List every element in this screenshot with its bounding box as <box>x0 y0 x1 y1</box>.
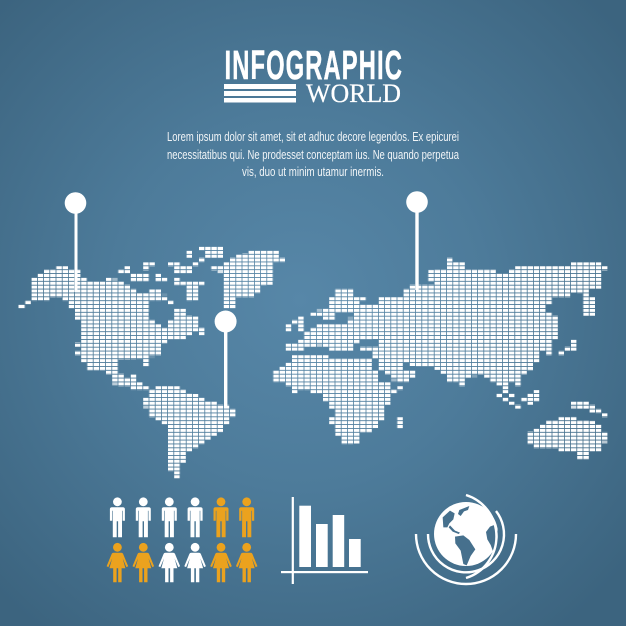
intro paragraph: Lorem ipsum dolor sit amet, sit et adhuc decore legendos. Ex epicurei <box>167 130 459 144</box>
bar chart icon <box>281 497 368 584</box>
intro paragraph: necessitatibus qui. Ne prodesset conceptam ius. Ne quando perpetua <box>167 148 459 162</box>
intro paragraph <box>167 130 459 179</box>
heading: World: WORLD <box>306 78 401 108</box>
people pictogram <box>107 497 257 582</box>
women row <box>107 543 257 582</box>
heading: Infographic: INFOGRAPHIC <box>224 44 403 89</box>
map pin: South America <box>215 310 237 408</box>
title <box>224 44 403 108</box>
title stripes <box>224 84 296 102</box>
globe icon <box>416 495 516 584</box>
men row <box>110 497 254 537</box>
intro paragraph: vis, duo ut minim utamur inermis. <box>242 165 384 179</box>
map pin: North America <box>65 192 86 292</box>
dotted world map <box>22 248 620 477</box>
map pin: Asia <box>406 191 428 290</box>
